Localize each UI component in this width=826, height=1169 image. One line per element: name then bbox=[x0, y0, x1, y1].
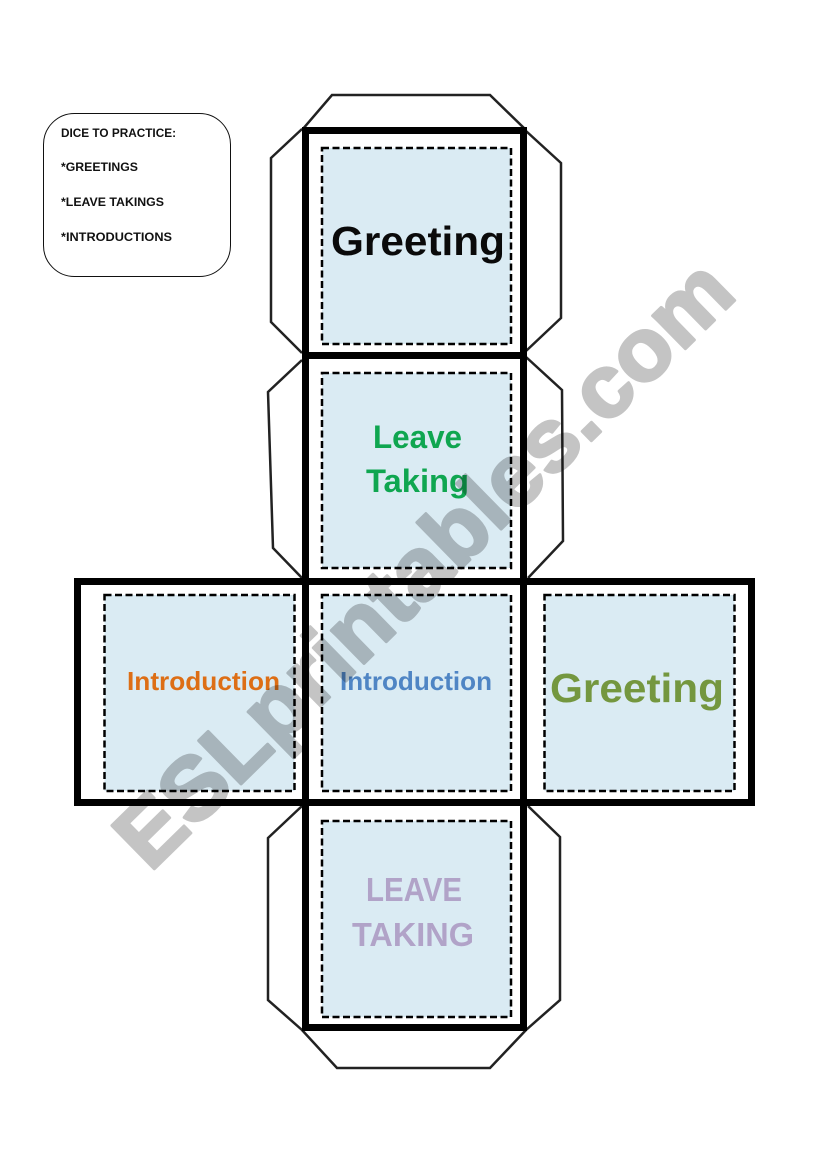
label: LEAVE TAKING (purple): TAKING bbox=[352, 916, 474, 953]
label: Introduction (blue): Introduction bbox=[340, 666, 492, 696]
glue flaps bbox=[268, 95, 563, 1068]
label: Greeting (top face): Greeting bbox=[331, 218, 505, 264]
info box: dice to practice bbox=[44, 114, 230, 276]
label: Leave Taking (green) bbox=[366, 419, 469, 499]
watermark: ESLprintables.com: ESLprintables.com bbox=[94, 239, 752, 887]
info box: dice to practice: *GREETINGS bbox=[61, 162, 138, 174]
info box: dice to practice: *INTRODUCTIONS bbox=[61, 232, 172, 244]
label: Leave Taking (green): Taking bbox=[366, 463, 469, 499]
label: LEAVE TAKING (purple) bbox=[352, 871, 474, 953]
label: Greeting (green): Greeting bbox=[550, 665, 724, 711]
info box: dice to practice: DICE TO PRACTICE: bbox=[61, 128, 176, 140]
thick cube net frame bbox=[78, 130, 752, 1028]
blue dice faces with dashed cut lines bbox=[104, 148, 734, 1017]
info box: dice to practice: *LEAVE TAKINGS bbox=[61, 197, 164, 209]
label: Introduction (orange): Introduction bbox=[127, 666, 280, 696]
label: Leave Taking (green): Leave bbox=[373, 419, 462, 455]
label: LEAVE TAKING (purple): LEAVE bbox=[366, 871, 462, 908]
